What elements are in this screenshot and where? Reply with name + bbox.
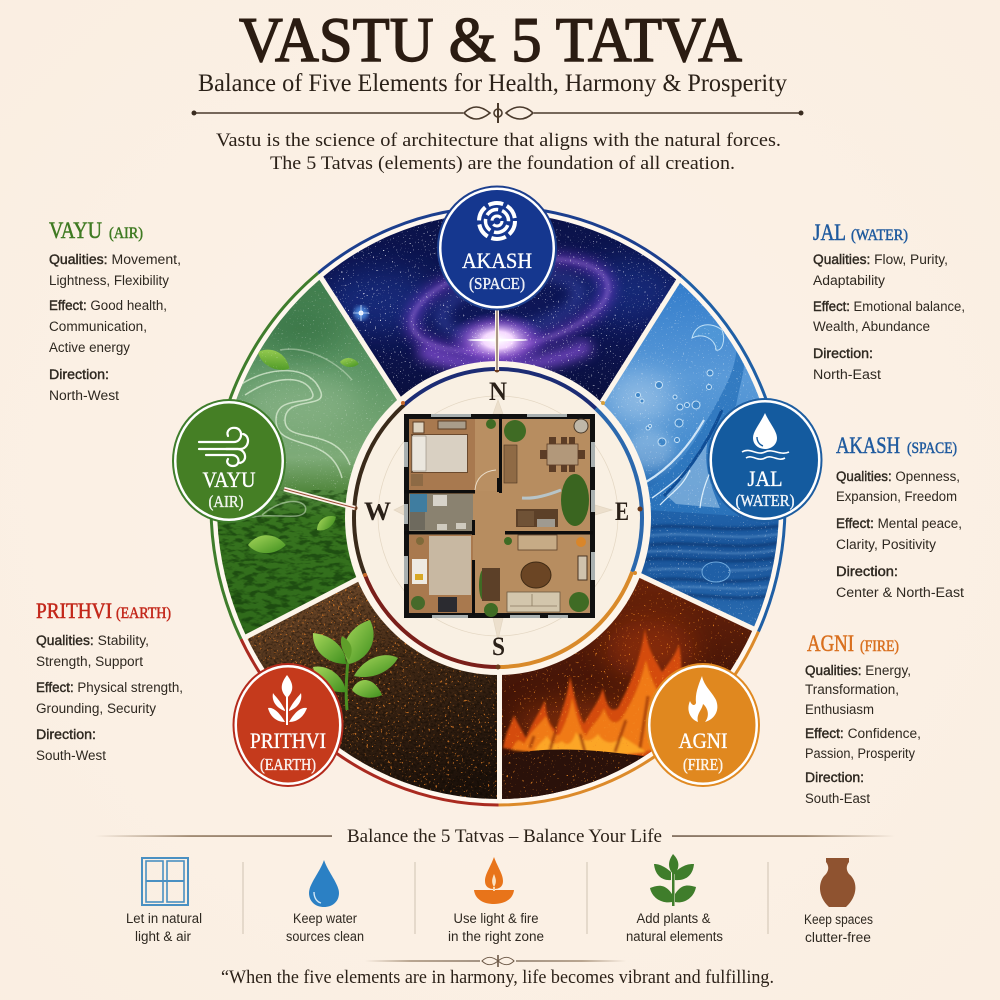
- panel: agni fire description: Direction:: [805, 770, 864, 785]
- tip: plants: [626, 854, 723, 944]
- kitchen: [409, 535, 473, 613]
- icon: wind: [199, 428, 248, 466]
- panel: akash space description: Expansion, Freedom: [836, 489, 957, 504]
- node: vayu: VAYU: [202, 467, 256, 492]
- panel: prithvi earth description: Strength, Support: [36, 654, 143, 669]
- closing quote: “When the five elements are in harmony, life becomes vibrant and fulfilling.: [221, 967, 774, 988]
- round table: [521, 562, 551, 588]
- heading: vayu: [49, 218, 143, 243]
- icon: window: [142, 858, 188, 905]
- heading: agni: [807, 631, 899, 656]
- droplets: [636, 370, 713, 446]
- panel: jal water description: Qualities: Flow, Purity,: [813, 252, 948, 267]
- bottom heading: Balance the 5 Tatvas – Balance Your Life: [347, 827, 662, 847]
- panel: jal water description: Direction:: [813, 346, 873, 361]
- panel: prithvi earth description: Qualities: Stability,: [36, 633, 149, 648]
- tip: plants: Add plants &: [636, 911, 710, 926]
- heading: vayu: VAYU: [49, 218, 102, 243]
- tip: natural light: Let in natural: [126, 911, 202, 926]
- tip: clean water: [286, 860, 364, 944]
- bedroom: [409, 419, 500, 491]
- connector: vayu to west: [284, 489, 355, 508]
- heading: prithvi: PRITHVI: [36, 598, 112, 623]
- compass rose: [378, 396, 618, 640]
- outer colored ring: [211, 207, 785, 805]
- heading: vayu: (AIR): [109, 225, 143, 242]
- floor plan: [404, 414, 595, 618]
- armchair group: [479, 568, 500, 601]
- segment: earth soil: [248, 582, 497, 799]
- connector: akash to north: [495, 308, 499, 370]
- node: agni: [646, 663, 760, 787]
- node: jal: JAL: [748, 466, 782, 491]
- tip: clutter free: clutter-free: [805, 930, 871, 945]
- node: akash: (SPACE): [469, 274, 525, 293]
- icon: leaves: [268, 675, 307, 725]
- heading: akash: (SPACE): [907, 440, 957, 457]
- panel: jal water description: North-East: [813, 367, 881, 382]
- wind swirls: [240, 349, 352, 520]
- panel: agni fire description: Qualities: Energy,: [805, 663, 911, 678]
- heading: agni: AGNI: [807, 631, 854, 656]
- panel: vayu air description: Lightness, Flexibility: [49, 273, 169, 288]
- node: agni: AGNI: [678, 728, 728, 753]
- plant in soil: [313, 620, 398, 710]
- tip: natural light: light & air: [135, 929, 191, 944]
- panel: prithvi earth description: [36, 598, 183, 763]
- compass letters: E: [615, 497, 629, 526]
- compass letters: W: [364, 497, 391, 526]
- tip: light and fire: [448, 857, 544, 944]
- heading: akash: AKASH: [836, 433, 900, 458]
- tip: clutter free: Keep spaces: [804, 912, 873, 927]
- intro text: The 5 Tatvas (elements) are the foundation of all creation.: [270, 154, 735, 174]
- icon: plant: [650, 854, 696, 906]
- water ripples: [640, 526, 782, 598]
- tip: clean water: Keep water: [293, 911, 357, 926]
- panel: jal water description: [813, 220, 965, 382]
- panel: prithvi earth description: Grounding, Security: [36, 701, 156, 716]
- panel: vayu air description: [49, 218, 181, 403]
- panel: prithvi earth description: South-West: [36, 748, 106, 763]
- tip: natural light: [126, 858, 202, 944]
- five elements wheel: [172, 186, 822, 810]
- side console: [578, 556, 587, 580]
- shelf: [504, 445, 517, 483]
- bathroom: [409, 494, 473, 531]
- heading: jal: [813, 220, 908, 245]
- light sofa: [518, 535, 557, 550]
- heading: akash: [836, 433, 957, 458]
- heading: prithvi: [36, 598, 171, 623]
- panel: agni fire description: [805, 631, 921, 806]
- dining area: [540, 419, 588, 472]
- panel: vayu air description: Direction:: [49, 367, 109, 382]
- ornament divider: [192, 103, 804, 123]
- icon: flame: [688, 676, 717, 722]
- panel: agni fire description: Transformation,: [805, 682, 899, 697]
- title: VASTU & 5 TATVA: [239, 4, 742, 75]
- panel: prithvi earth description: Effect: Physical strength,: [36, 680, 183, 695]
- bottom sofa: [507, 592, 560, 612]
- heading: agni: (FIRE): [860, 638, 899, 655]
- bottom ornament: [365, 955, 626, 967]
- tip: light and fire: in the right zone: [448, 929, 544, 944]
- tip: plants: natural elements: [626, 929, 723, 944]
- icon: spiral: [479, 203, 515, 239]
- node: vayu: [172, 399, 286, 523]
- splash: [645, 322, 744, 516]
- intro text: [216, 131, 781, 174]
- node: prithvi: PRITHVI: [250, 728, 326, 753]
- panel: agni fire description: Effect: Confidence,: [805, 726, 921, 741]
- segment: air breeze: [217, 280, 397, 634]
- node: jal: [708, 398, 822, 522]
- panel: agni fire description: Passion, Prosperity: [805, 746, 915, 761]
- tip: light and fire: Use light & fire: [454, 911, 538, 926]
- heading: jal: (WATER): [851, 227, 908, 244]
- center compass disc: [345, 361, 651, 675]
- panel: vayu air description: Effect: Good health,: [49, 298, 167, 313]
- compass letters: N: [489, 377, 507, 406]
- node: agni: (FIRE): [683, 755, 723, 774]
- segment: fire flames: [502, 578, 752, 799]
- panel: akash space description: Effect: Mental peace,: [836, 516, 962, 531]
- segment: water splash: [604, 283, 779, 626]
- panel: akash space description: [836, 433, 964, 600]
- panel: jal water description: Wealth, Abundance: [813, 319, 930, 334]
- node: jal: (WATER): [736, 491, 794, 510]
- heading: jal: JAL: [813, 220, 846, 245]
- panel: akash space description: Center & North-East: [836, 585, 964, 600]
- brown sofa: [516, 509, 558, 527]
- panel: jal water description: Adaptability: [813, 273, 885, 288]
- tip: clutter free: [804, 858, 873, 945]
- junction dots: [352, 368, 642, 670]
- tip: clean water: sources clean: [286, 929, 364, 944]
- panel: akash space description: Clarity, Positivity: [836, 537, 936, 552]
- segment dividers: [244, 273, 758, 806]
- intro text: Vastu is the science of architecture that aligns with the natural forces.: [216, 131, 781, 151]
- panel: vayu air description: Active energy: [49, 340, 130, 355]
- node: akash: AKASH: [462, 248, 532, 273]
- icon: oil lamp: [474, 857, 514, 904]
- node: akash: [437, 186, 557, 310]
- leaves: [248, 344, 359, 553]
- compass letters: [364, 377, 629, 661]
- panel: agni fire description: Enthusiasm: [805, 702, 874, 717]
- heading: prithvi: (EARTH): [116, 605, 171, 622]
- curved counter: [522, 490, 561, 498]
- icon: water drop: [742, 413, 789, 459]
- node: vayu: (AIR): [208, 492, 244, 511]
- panel: vayu air description: Communication,: [49, 319, 147, 334]
- icon: drop: [309, 860, 339, 907]
- node: prithvi: [232, 663, 344, 787]
- icon: clay pot: [820, 858, 855, 907]
- panel: vayu air description: Qualities: Movement,: [49, 252, 181, 267]
- panel: akash space description: Qualities: Openness,: [836, 469, 960, 484]
- panel: agni fire description: South-East: [805, 791, 870, 806]
- panel: akash space description: Direction:: [836, 564, 898, 579]
- subtitle: Balance of Five Elements for Health, Harmony & Prosperity: [198, 70, 787, 97]
- panel: prithvi earth description: Direction:: [36, 727, 96, 742]
- node: prithvi: (EARTH): [260, 755, 316, 774]
- segment: space galaxy: [323, 218, 676, 402]
- windows: [404, 414, 595, 618]
- indoor plants: [484, 419, 589, 617]
- panel: jal water description: Effect: Emotional balance,: [813, 299, 965, 314]
- compass letters: S: [492, 632, 505, 661]
- interior walls: [404, 414, 593, 615]
- panel: vayu air description: North-West: [49, 388, 119, 403]
